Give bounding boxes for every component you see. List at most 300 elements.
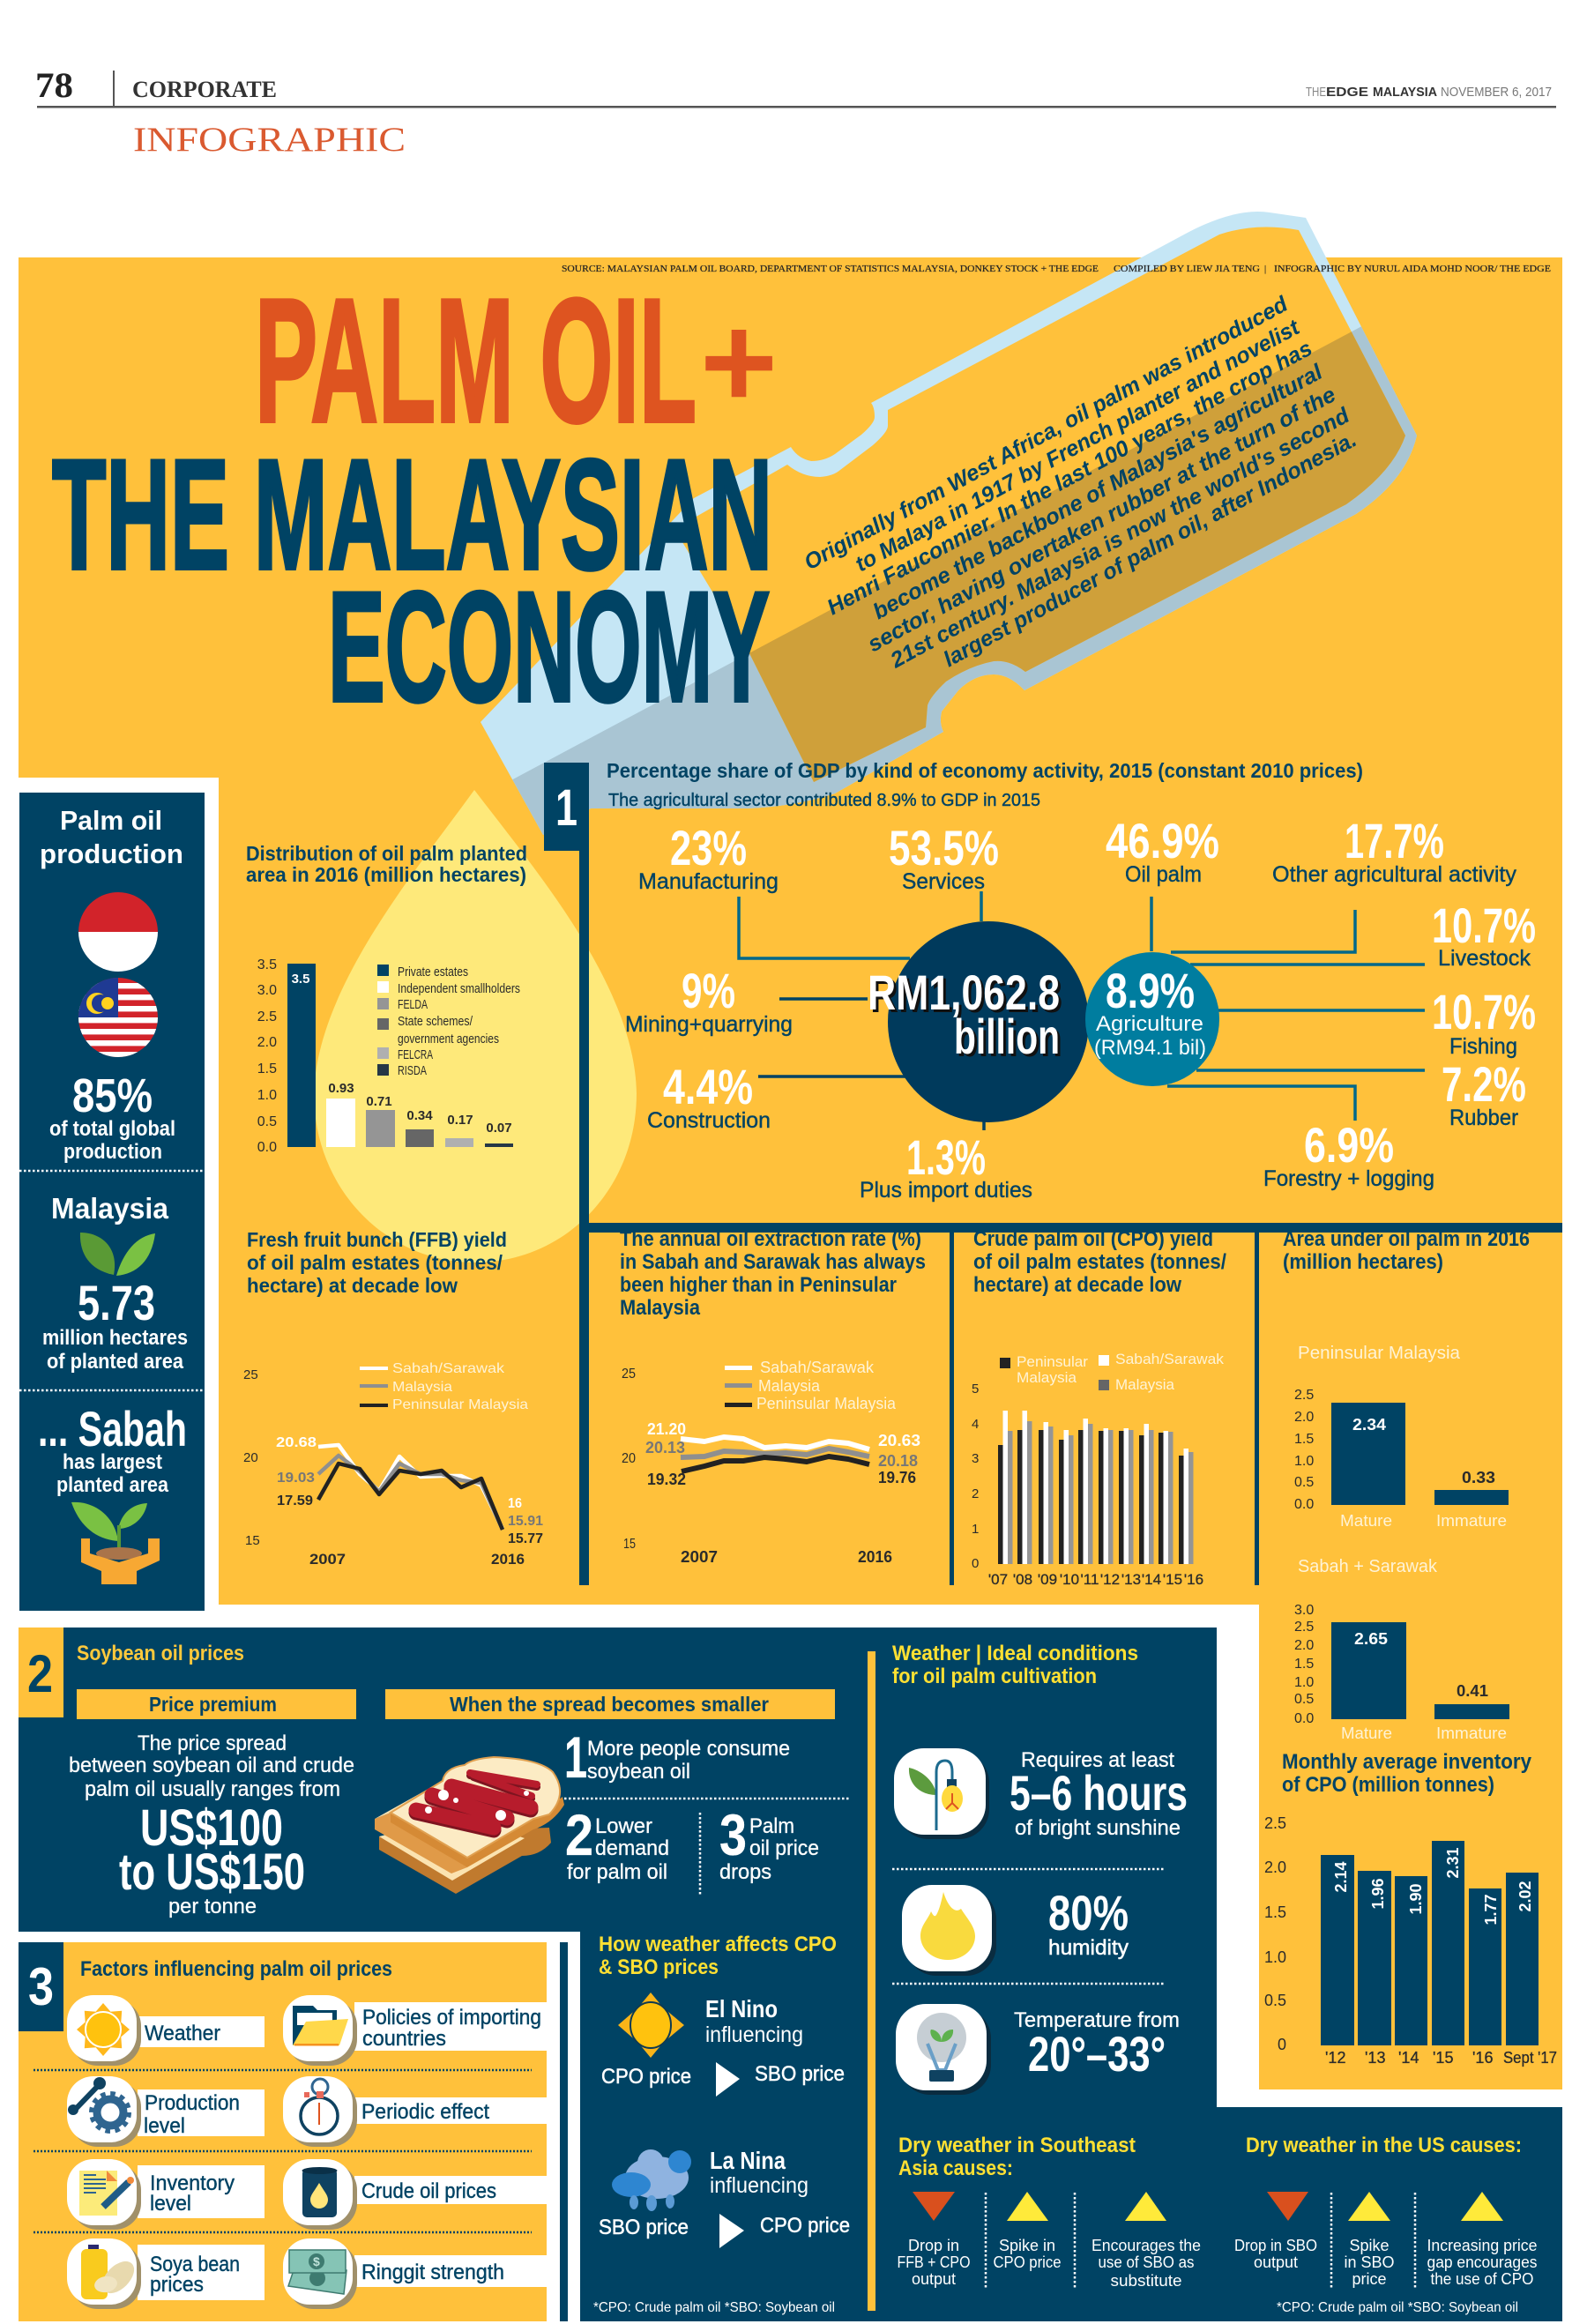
chart: oil extraction rate xyxy=(620,1227,926,1566)
panel 2: soybean oil prices xyxy=(19,1628,849,1918)
step 1 xyxy=(564,1724,790,1790)
factor: crude oil prices xyxy=(283,2159,547,2230)
GDP category labels: Forestry + logging xyxy=(1263,1166,1434,1191)
GDP percentages: 53.5% xyxy=(889,820,999,875)
effect: drop in output xyxy=(898,2192,970,2288)
factor: ringgit strength xyxy=(283,2238,547,2309)
divider bar: weather xyxy=(868,1651,875,2311)
legend: Malaysia xyxy=(1115,1376,1175,1393)
x axis labels xyxy=(1325,2049,1557,2067)
effect: SBO price spike: Spike xyxy=(1349,2237,1390,2254)
oil drop background xyxy=(314,790,637,1263)
publication and date: NOVEMBER 6, 2017 xyxy=(1441,85,1552,100)
panel: ideal conditions xyxy=(892,1642,1188,2095)
agriculture circle: Agriculture xyxy=(1096,1012,1203,1036)
connector lines xyxy=(739,891,1425,1130)
chart heading: Crude palm oil (CPO) yield xyxy=(973,1227,1213,1251)
effect: SBO price spike: in SBO xyxy=(1344,2253,1395,2271)
price premium banner: Price premium xyxy=(149,1693,277,1716)
La Nina effect: La Nina xyxy=(710,2147,786,2174)
chart heading: hectare) at decade low xyxy=(247,1274,458,1297)
line values: 16 xyxy=(508,1496,522,1511)
panel 2 number box xyxy=(19,1628,63,1717)
chart heading: (million hectares) xyxy=(1283,1250,1443,1274)
El Nino effect: El Nino xyxy=(705,1995,778,2022)
legend: Independent smallholders xyxy=(398,981,520,996)
step 1: More people consume xyxy=(587,1737,790,1761)
GDP percentages: 4.4% xyxy=(663,1059,753,1114)
step 1: soybean oil xyxy=(587,1760,690,1784)
factor: ringgit strength: Ringgit strength xyxy=(361,2261,504,2284)
factor: soya bean prices xyxy=(67,2238,264,2309)
Sabah and Sarawak bars: 0.5 xyxy=(1294,1692,1314,1707)
step 3: 3 xyxy=(719,1802,747,1867)
title: + xyxy=(700,287,778,436)
effect: drop in output: Drop in xyxy=(908,2237,959,2254)
intro text on bottle: 21st century. Malaysia is now the world's second xyxy=(886,403,1354,674)
source credits: INFOGRAPHIC BY NURUL AIDA MOHD NOOR/ THE EDGE xyxy=(1274,264,1551,274)
GDP percentages: 17.7% xyxy=(1345,813,1444,868)
x axis labels: '13 xyxy=(1365,2049,1385,2067)
GDP category labels: Mining+quarrying xyxy=(625,1012,793,1037)
y axis labels: 15 xyxy=(245,1533,260,1548)
GDP category labels: Rubber xyxy=(1449,1106,1518,1130)
chart heading: area in 2016 (million hectares) xyxy=(246,863,526,886)
panel 3 heading: Factors influencing palm oil prices xyxy=(80,1957,392,1981)
GDP percentages: 10.7% xyxy=(1432,898,1536,953)
y axis labels: 0.5 xyxy=(257,1114,277,1129)
y axis labels: 3 xyxy=(972,1451,979,1466)
factor: policies: Policies of importing xyxy=(362,2006,541,2030)
bar values xyxy=(292,972,512,1136)
effect: use of SBO xyxy=(1092,2192,1201,2290)
price spread text: palm oil usually ranges from xyxy=(85,1777,340,1801)
Sabah and Sarawak bars: 0.41 xyxy=(1457,1682,1488,1700)
Peninsular Malaysia bars: 2.34 xyxy=(1352,1416,1386,1434)
sunshine requirement: Requires at least xyxy=(1021,1748,1174,1772)
price spread text: The price spread xyxy=(138,1732,287,1755)
x axis labels: '13 xyxy=(1121,1571,1141,1588)
chart heading: in Sabah and Sarawak has always xyxy=(620,1250,926,1274)
conditions heading: Weather | Ideal conditions xyxy=(892,1642,1138,1665)
El Nino effect xyxy=(601,1995,845,2097)
factor: inventory level xyxy=(67,2159,264,2230)
effect: drop in output: output xyxy=(912,2270,956,2288)
panel dividers xyxy=(579,851,1562,1585)
legend: Peninsular Malaysia xyxy=(392,1397,528,1412)
spread banner xyxy=(385,1689,835,1719)
panel 2 number box: 2 xyxy=(27,1644,53,1703)
stat: Sabah: has largest xyxy=(63,1450,162,1474)
y axis labels xyxy=(622,1367,636,1552)
y axis labels: 25 xyxy=(243,1367,258,1382)
stat: 5.73 million hectares: of planted area xyxy=(47,1350,184,1374)
agriculture circle xyxy=(1085,952,1219,1086)
legend: Sabah/Sarawak xyxy=(392,1361,505,1376)
line values: 17.59 xyxy=(277,1493,313,1508)
y axis labels: 0 xyxy=(1278,2036,1286,2053)
effect: CPO price spike: CPO price xyxy=(993,2253,1062,2271)
chart heading: Monthly average inventory xyxy=(1282,1750,1532,1774)
x axis labels: '15 xyxy=(1163,1571,1182,1588)
agriculture circle: (RM94.1 bil) xyxy=(1094,1036,1206,1060)
publication and date: EDGE xyxy=(1326,85,1368,100)
y axis labels: 1.0 xyxy=(1264,1948,1286,1966)
production heading: Palm oil xyxy=(60,805,162,836)
sunshine requirement xyxy=(1010,1748,1188,1840)
line values: 20.18 xyxy=(878,1452,918,1470)
GDP percentages: 1.3% xyxy=(906,1129,986,1185)
y axis labels: 1 xyxy=(972,1522,979,1537)
Sabah and Sarawak bars: Sabah + Sarawak xyxy=(1298,1557,1438,1576)
intro text on bottle: Henri Fauconnier. In the last 100 years, the crop has xyxy=(823,336,1316,620)
x axis labels: '08 xyxy=(1013,1571,1032,1588)
x axis labels xyxy=(988,1571,1203,1588)
effect: use of SBO: substitute xyxy=(1111,2272,1181,2290)
bars xyxy=(1321,1841,1539,2045)
effect: drop in SBO output: Drop in SBO xyxy=(1234,2237,1317,2254)
factor: production level xyxy=(67,2076,264,2147)
temperature requirement: 20°–33° xyxy=(1028,2026,1166,2082)
line values: 20.13 xyxy=(645,1439,685,1456)
conditions heading: for oil palm cultivation xyxy=(892,1665,1097,1688)
temperature requirement xyxy=(1014,2008,1180,2082)
step 2 xyxy=(565,1802,669,1884)
effect: CPO price spike xyxy=(993,2192,1062,2271)
factor: production level: level xyxy=(144,2114,185,2138)
chart: monthly CPO inventory xyxy=(1264,1750,1557,2067)
y axis labels: 1.5 xyxy=(257,1061,277,1076)
panel 3 number box xyxy=(19,1942,63,2031)
intro text on bottle: largest producer of palm oil, after Indonesia. xyxy=(939,427,1360,672)
production heading xyxy=(40,805,183,869)
GDP category labels: Plus import duties xyxy=(860,1178,1032,1203)
line values: 15.77 xyxy=(508,1531,543,1546)
line values: 2016 xyxy=(491,1551,525,1568)
Peninsular Malaysia bars: 0.33 xyxy=(1462,1469,1495,1486)
chart heading: Area under oil palm in 2016 xyxy=(1283,1227,1530,1251)
line values: 21.20 xyxy=(647,1420,686,1438)
chart heading: of oil palm estates (tonnes/ xyxy=(247,1251,503,1274)
publication and date xyxy=(1306,85,1552,100)
title: PALM OIL xyxy=(255,263,697,459)
step 3: oil price xyxy=(749,1836,819,1860)
Sabah and Sarawak bars: 0.0 xyxy=(1294,1711,1314,1726)
y axis labels: 2.0 xyxy=(1264,1858,1286,1876)
line values: 15.91 xyxy=(508,1514,543,1529)
Peninsular Malaysia bars: 2.5 xyxy=(1294,1388,1314,1403)
bar values: 0.71 xyxy=(366,1094,392,1109)
factor: policies: countries xyxy=(362,2027,446,2051)
chart heading: Malaysia xyxy=(620,1296,701,1320)
conditions heading xyxy=(892,1642,1138,1688)
Malaysia heading: Malaysia xyxy=(51,1192,169,1225)
line values: 20.68 xyxy=(276,1435,317,1450)
panel: dry weather in the US xyxy=(1234,2134,1538,2315)
Peninsular Malaysia bars: 1.5 xyxy=(1294,1432,1314,1447)
step 3: Palm xyxy=(749,1814,794,1838)
footnote: *CPO: Crude palm oil *SBO: Soybean oil xyxy=(593,2300,835,2315)
GDP percentages xyxy=(663,813,1536,1185)
panel: palm oil production xyxy=(19,793,205,1611)
x axis labels: '16 xyxy=(1184,1571,1203,1588)
panel 1 number box: 1 xyxy=(555,779,577,837)
sunshine requirement: of bright sunshine xyxy=(1015,1816,1181,1840)
line values: 19.32 xyxy=(647,1471,686,1488)
white frame behind production panel xyxy=(19,778,219,1628)
icon: Malaysia flag xyxy=(78,978,158,1057)
stat: 85 percent: of total global xyxy=(49,1117,175,1141)
stat: 5.73 million hectares xyxy=(42,1275,188,1374)
y axis labels: 5 xyxy=(972,1382,979,1397)
effect: price gap: Increasing price xyxy=(1427,2237,1538,2254)
Peninsular Malaysia bars: 1.0 xyxy=(1294,1454,1314,1469)
y axis labels: 4 xyxy=(972,1417,979,1432)
legend: Private estates xyxy=(398,965,468,980)
Sabah and Sarawak bars xyxy=(1294,1557,1509,1742)
factor: policies xyxy=(283,1995,547,2066)
Sabah and Sarawak bars: 1.0 xyxy=(1294,1675,1314,1690)
GDP category labels: Oil palm xyxy=(1125,862,1202,887)
Peninsular Malaysia bars: 0.0 xyxy=(1294,1497,1314,1512)
GDP percentages: 46.9% xyxy=(1106,813,1219,868)
publication and date: THE xyxy=(1306,85,1326,100)
source credits: COMPILED BY LIEW JIA TENG xyxy=(1114,264,1260,274)
panel 3 number box: 3 xyxy=(28,1957,54,2016)
title xyxy=(52,263,778,734)
y axis labels: 1.5 xyxy=(1264,1903,1286,1921)
x axis labels: '11 xyxy=(1081,1571,1099,1588)
bar values: 1.90 xyxy=(1407,1883,1425,1915)
effect: CPO price spike: Spike in xyxy=(999,2237,1055,2254)
legend: government agencies xyxy=(398,1032,499,1047)
humidity requirement xyxy=(1048,1885,1129,1960)
legend: FELCRA xyxy=(398,1047,433,1062)
icon: seedling in hands xyxy=(71,1502,160,1584)
chart heading: Distribution of oil palm planted xyxy=(246,842,527,865)
legend xyxy=(725,1359,897,1412)
legend: FELDA xyxy=(398,997,428,1012)
La Nina effect: CPO price xyxy=(760,2214,850,2238)
y axis labels: 3.5 xyxy=(257,957,277,972)
x axis labels: Sept '17 xyxy=(1503,2049,1557,2067)
icon: Indonesia flag xyxy=(78,892,158,972)
price spread text xyxy=(69,1732,354,1918)
legend: RISDA xyxy=(398,1063,427,1078)
GDP percentages: 9% xyxy=(682,963,735,1018)
source credits: | xyxy=(1264,264,1266,274)
y axis labels xyxy=(1264,1814,1286,2053)
Southeast Asia heading: Dry weather in Southeast xyxy=(898,2134,1136,2157)
section label: CORPORATE xyxy=(132,77,277,102)
bar values: 0.34 xyxy=(406,1108,433,1123)
GDP heading xyxy=(607,759,1363,810)
line values: 2016 xyxy=(858,1548,892,1566)
stat: 5.73 million hectares: 5.73 xyxy=(78,1275,155,1330)
factor: weather: Weather xyxy=(145,2022,220,2045)
stat: Sabah xyxy=(38,1401,187,1497)
step 2: demand xyxy=(595,1836,669,1860)
intro text on bottle: to Malaya in 1917 by French planter and novelist xyxy=(851,315,1305,577)
y axis labels: 20 xyxy=(622,1451,636,1466)
GDP category labels: Fishing xyxy=(1449,1034,1517,1059)
GDP heading: Percentage share of GDP by kind of economy activity, 2015 (constant 2010 prices) xyxy=(607,759,1363,782)
lines xyxy=(318,1445,503,1530)
line values xyxy=(276,1435,543,1568)
panel: GDP share xyxy=(607,759,1536,1203)
GDP category labels: Livestock xyxy=(1438,946,1531,971)
intro text on bottle: Originally from West Africa, oil palm was introduced xyxy=(800,292,1293,575)
GDP percentages: 6.9% xyxy=(1304,1117,1394,1173)
legend: Peninsular Malaysia xyxy=(756,1395,897,1412)
panel: soybean oil prices and weather background xyxy=(19,1628,1562,2321)
panel 3: factors influencing prices xyxy=(19,1942,568,2321)
bar values xyxy=(1332,1847,1534,1925)
legend xyxy=(1000,1351,1225,1393)
factor: periodic effect: Periodic effect xyxy=(361,2100,489,2124)
yellow background panel xyxy=(19,257,1562,2089)
step 2: for palm oil xyxy=(567,1860,667,1884)
humidity requirement: humidity xyxy=(1048,1936,1129,1960)
y axis labels xyxy=(972,1382,979,1571)
y axis labels: 2.5 xyxy=(257,1009,277,1024)
stat: 5.73 million hectares: million hectares xyxy=(42,1326,188,1350)
factor: inventory level: level xyxy=(150,2192,191,2216)
GDP percentages: 7.2% xyxy=(1442,1056,1526,1112)
x axis labels: '10 xyxy=(1060,1571,1079,1588)
bar values: 3.5 xyxy=(292,972,309,987)
El Nino effect: CPO price xyxy=(601,2065,691,2089)
factor: soya bean prices: Soya bean xyxy=(150,2253,240,2276)
Peninsular Malaysia bars: 2.0 xyxy=(1294,1410,1314,1425)
factor: soya bean prices: prices xyxy=(150,2273,204,2297)
y axis labels: 0.0 xyxy=(257,1140,277,1155)
effect: drop in output: FFB + CPO xyxy=(898,2253,970,2271)
legend: Sabah/Sarawak xyxy=(1115,1351,1225,1367)
Southeast Asia heading xyxy=(898,2134,1136,2180)
icon: temperature bulb xyxy=(896,2004,991,2095)
stat: 85 percent: 85% xyxy=(72,1069,153,1122)
GDP category labels: Manufacturing xyxy=(638,869,779,894)
sunshine requirement: 5–6 hours xyxy=(1010,1765,1188,1821)
y axis labels: 2.5 xyxy=(1264,1814,1286,1832)
bar values: 2.14 xyxy=(1332,1861,1350,1893)
effect: drop in SBO output xyxy=(1234,2192,1317,2271)
Sabah and Sarawak bars: 3.0 xyxy=(1294,1603,1314,1618)
GDP heading: The agricultural sector contributed 8.9% to GDP in 2015 xyxy=(608,791,1040,810)
factor: crude oil prices: Crude oil prices xyxy=(361,2179,496,2203)
y axis labels: 0.5 xyxy=(1264,1992,1286,2009)
effect: use of SBO: use of SBO as xyxy=(1099,2253,1194,2271)
factor: periodic effect xyxy=(283,2076,547,2147)
Sabah and Sarawak bars: Immature xyxy=(1436,1724,1507,1742)
Peninsular Malaysia bars: Mature xyxy=(1340,1512,1392,1530)
stat: 85 percent xyxy=(49,1069,175,1164)
line values xyxy=(645,1420,920,1566)
effect: drop in SBO output: output xyxy=(1254,2253,1298,2271)
y axis labels: 20 xyxy=(243,1450,258,1465)
chart heading: of CPO (million tonnes) xyxy=(1282,1773,1494,1797)
legend: Peninsular xyxy=(1017,1353,1088,1370)
x axis labels: '14 xyxy=(1142,1571,1161,1588)
step 2: Lower xyxy=(595,1814,652,1838)
GDP percentages: 23% xyxy=(670,820,747,875)
chart heading xyxy=(1282,1750,1532,1797)
Peninsular Malaysia bars: Peninsular Malaysia xyxy=(1298,1344,1461,1363)
legend xyxy=(377,965,520,1078)
bar values: 0.93 xyxy=(328,1081,354,1096)
price spread text: US$100 xyxy=(140,1799,283,1857)
stat: Sabah: ... Sabah xyxy=(38,1401,187,1456)
step 3: drops xyxy=(719,1860,771,1884)
Peninsular Malaysia bars: 0.5 xyxy=(1294,1475,1314,1490)
icon: leaves xyxy=(80,1233,155,1276)
stat: Sabah: planted area xyxy=(56,1473,169,1497)
US heading: Dry weather in the US causes: xyxy=(1246,2134,1522,2157)
x axis labels: '15 xyxy=(1433,2049,1453,2067)
La Nina effect xyxy=(599,2147,850,2248)
price spread text: to US$150 xyxy=(119,1844,305,1901)
line values: 19.03 xyxy=(277,1471,315,1486)
y axis labels: 2.0 xyxy=(257,1035,277,1050)
La Nina effect: SBO price xyxy=(599,2216,689,2239)
total GDP circle: RM1,062.8 xyxy=(868,965,1060,1020)
Peninsular Malaysia bars: Immature xyxy=(1436,1512,1507,1530)
panel 1 number box xyxy=(544,763,589,851)
Sabah and Sarawak bars: 2.5 xyxy=(1294,1620,1314,1635)
weather effect heading xyxy=(599,1933,837,1979)
Sabah and Sarawak bars: 1.5 xyxy=(1294,1657,1314,1672)
panel 2 heading: Soybean oil prices xyxy=(77,1642,244,1665)
chart heading xyxy=(1283,1227,1530,1274)
line values: 2007 xyxy=(681,1548,718,1566)
y axis labels: 3.0 xyxy=(257,983,277,998)
step 1: 1 xyxy=(564,1724,587,1790)
icon: sun xyxy=(618,1993,684,2058)
chart heading xyxy=(620,1227,926,1320)
humidity requirement: 80% xyxy=(1048,1885,1129,1940)
factor: production level: Production xyxy=(145,2091,240,2115)
icon: toast with jam xyxy=(375,1757,564,1894)
GDP category labels: Other agricultural activity xyxy=(1272,862,1516,887)
y axis labels: 0 xyxy=(972,1556,979,1571)
bottle illustration xyxy=(481,212,1417,835)
GDP category labels xyxy=(625,862,1531,1203)
x axis labels: '09 xyxy=(1038,1571,1057,1588)
y axis labels: 15 xyxy=(623,1537,636,1552)
masthead xyxy=(35,65,1556,159)
effect: price gap: the use of CPO xyxy=(1430,2270,1534,2288)
spread banner: When the spread becomes smaller xyxy=(450,1693,769,1716)
GDP category labels: Services xyxy=(902,869,985,894)
chart heading xyxy=(246,842,527,886)
intro text on bottle xyxy=(800,292,1360,674)
total GDP circle xyxy=(868,921,1089,1122)
intro text on bottle: sector, having overtaken rubber at the turn of the xyxy=(863,382,1340,657)
effect: price gap xyxy=(1427,2192,1538,2288)
chart heading: hectare) at decade low xyxy=(973,1273,1181,1297)
chart: FFB yield xyxy=(243,1228,543,1568)
price premium banner xyxy=(77,1689,356,1719)
chart: CPO yield xyxy=(972,1227,1226,1588)
x axis labels: '12 xyxy=(1100,1571,1120,1588)
legend: State schemes/ xyxy=(398,1014,473,1029)
Southeast Asia heading: Asia causes: xyxy=(898,2156,1013,2180)
legend: Malaysia xyxy=(392,1380,452,1395)
factor: weather xyxy=(67,1995,264,2066)
icon: humidity flame xyxy=(902,1885,996,1976)
stat: 85 percent: production xyxy=(63,1140,162,1164)
